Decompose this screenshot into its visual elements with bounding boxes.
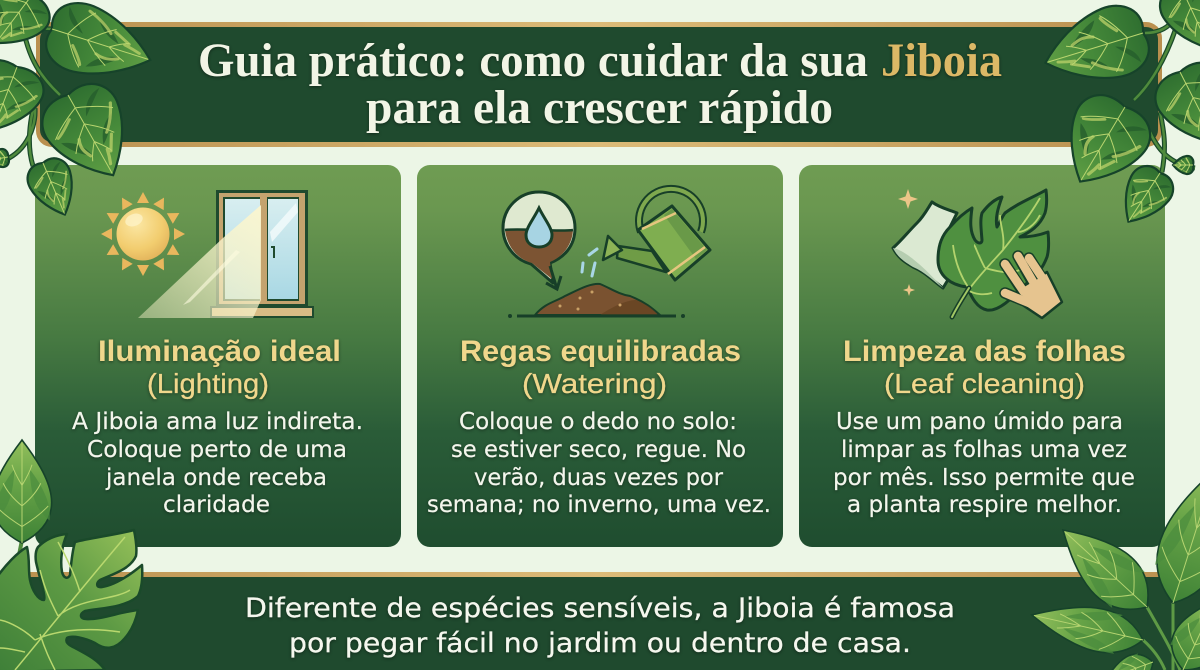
icon: water drops xyxy=(582,249,597,276)
leaf xyxy=(1147,54,1200,160)
text: leaf cleaning: por mês. Isso permite que xyxy=(833,465,1135,491)
leaf xyxy=(1045,511,1165,626)
text: watering: se estiver seco, regue. No xyxy=(451,437,746,463)
icon: sun xyxy=(101,192,185,276)
text: lighting: A Jiboia ama luz indireta. xyxy=(72,409,363,435)
leaf xyxy=(40,0,161,93)
heading: leaf cleaning: Limpeza das folhas xyxy=(843,335,1126,368)
icon: soil check bubble xyxy=(503,192,575,289)
icon: window with light beam xyxy=(138,190,314,318)
panel: lighting xyxy=(35,165,401,547)
text: watering: semana; no inverno, uma vez. xyxy=(427,492,771,518)
heading: lighting: Iluminação ideal xyxy=(98,335,341,368)
leaf xyxy=(1110,160,1179,234)
title text: Jiboia xyxy=(881,34,1002,87)
heading: leaf cleaning xyxy=(843,335,1126,399)
leaf xyxy=(0,0,57,61)
icon: hand xyxy=(1005,256,1062,318)
leaf xyxy=(0,148,10,169)
vine: top right xyxy=(1035,0,1200,234)
heading: leaf cleaning: (Leaf cleaning) xyxy=(884,368,1085,399)
title text: para ela crescer rápido xyxy=(366,81,833,134)
leaf xyxy=(1144,460,1200,612)
icon: cloth xyxy=(893,202,960,288)
foliage: bottom left xyxy=(0,440,142,670)
leaf xyxy=(1027,594,1148,661)
leaf xyxy=(1035,0,1155,97)
footer text xyxy=(245,593,955,659)
title text xyxy=(198,34,1002,134)
panel: watering xyxy=(417,165,783,547)
footer text: por pegar fácil no jardim ou dentro de casa. xyxy=(289,628,911,659)
text: lighting: Coloque perto de uma xyxy=(87,437,347,463)
icon: monstera leaf xyxy=(938,190,1049,317)
text: watering xyxy=(427,409,771,518)
leaf xyxy=(23,154,85,223)
monstera leaf xyxy=(0,530,142,670)
text: leaf cleaning: a planta respire melhor. xyxy=(847,492,1122,518)
footer banner xyxy=(0,572,1200,670)
leaf xyxy=(0,54,50,142)
leaf xyxy=(1153,0,1200,61)
vine: top left xyxy=(0,0,161,223)
leaf xyxy=(1162,590,1200,670)
text: lighting: claridade xyxy=(163,492,270,518)
text: watering: verão, duas vezes por xyxy=(474,465,724,491)
text: lighting: janela onde receba xyxy=(105,465,327,491)
leaf xyxy=(1173,156,1193,174)
title banner xyxy=(36,22,1162,147)
heading: watering: Regas equilibradas xyxy=(460,335,741,368)
leaf xyxy=(32,74,148,195)
text: lighting xyxy=(72,409,363,518)
heading: watering xyxy=(460,335,741,399)
foliage: bottom right xyxy=(1027,460,1200,670)
leaf xyxy=(1101,649,1158,670)
footer text: Diferente de espécies sensíveis, a Jiboia é famosa xyxy=(245,593,955,624)
icon: watering can xyxy=(603,189,710,280)
text: watering: Coloque o dedo no solo: xyxy=(459,409,737,435)
heading: watering: (Watering) xyxy=(522,368,667,399)
heading: lighting xyxy=(98,335,341,399)
leaf xyxy=(1046,85,1160,202)
heading: lighting: (Lighting) xyxy=(147,368,269,399)
text: leaf cleaning xyxy=(833,409,1135,518)
title text: Guia prático: como cuidar da sua xyxy=(198,34,868,87)
text: leaf cleaning: limpar as folhas uma vez xyxy=(841,437,1127,463)
leaf xyxy=(0,440,52,543)
icon: sparkles xyxy=(898,189,918,296)
icon: soil mound xyxy=(508,284,685,318)
text: leaf cleaning: Use um pano úmido para xyxy=(836,409,1123,435)
panel: leaf cleaning xyxy=(799,165,1165,547)
